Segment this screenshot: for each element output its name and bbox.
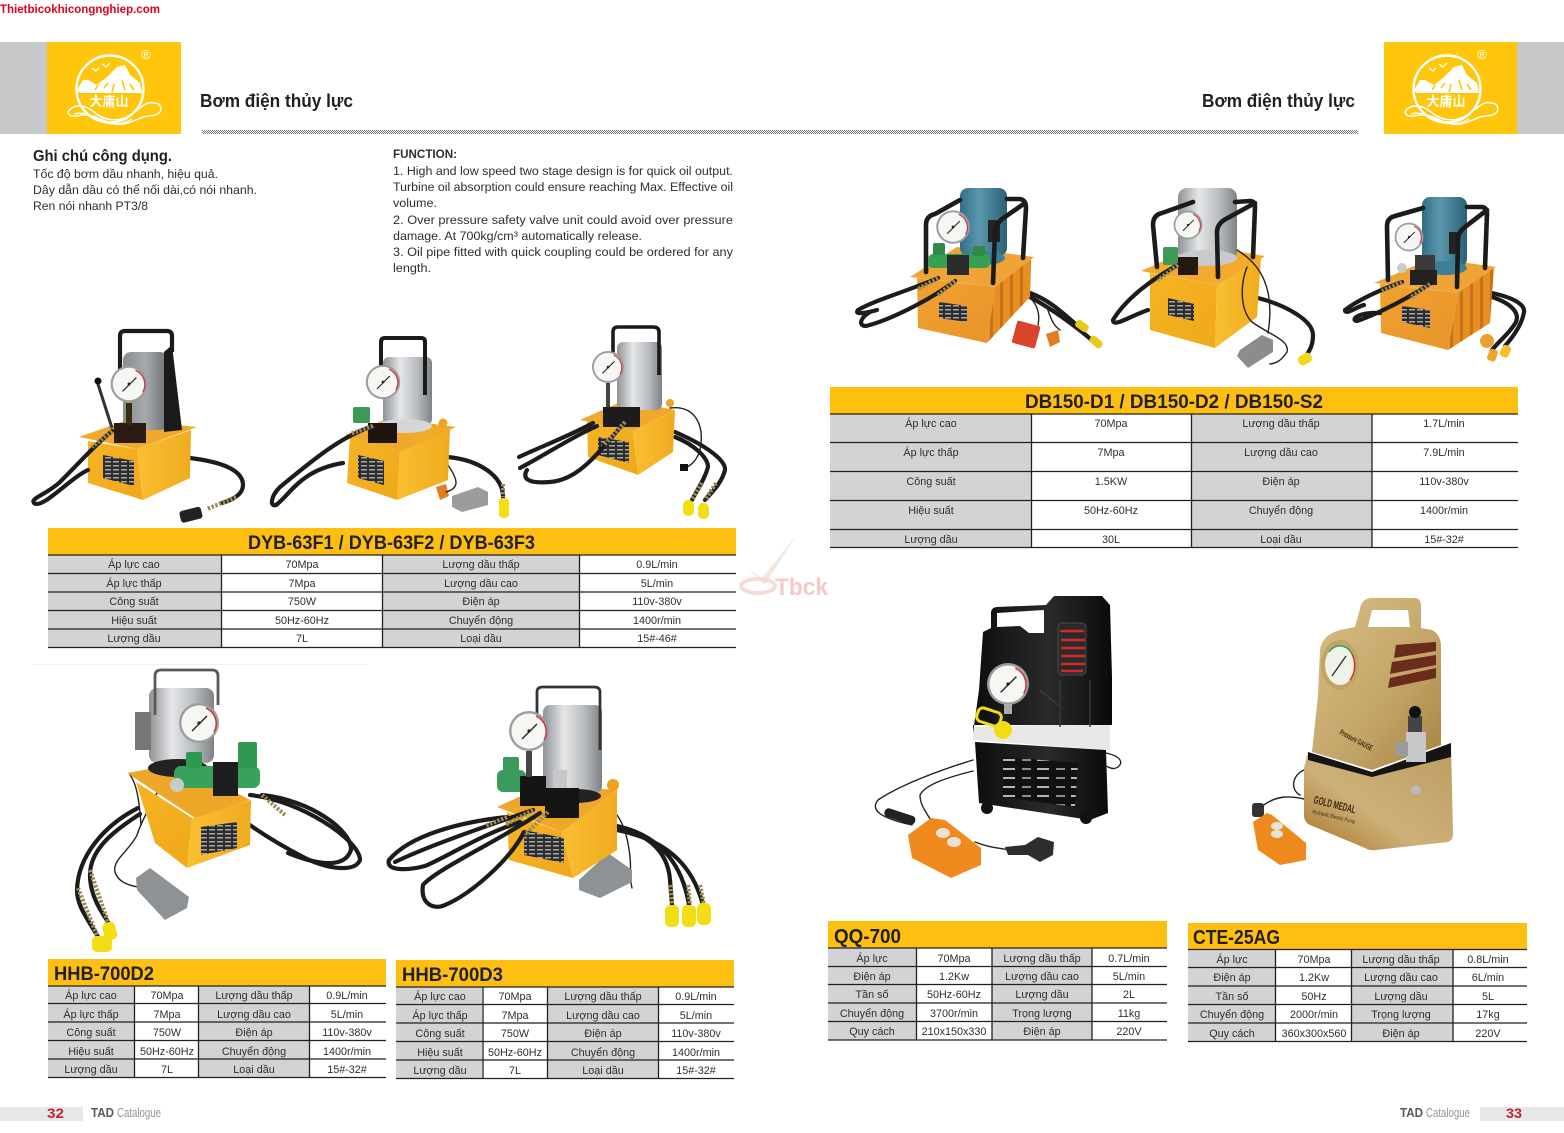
table body: 0.9L/min [326,990,368,1002]
table body: Lượng dầu thấp [564,991,642,1003]
table body: 3700r/min [930,1008,978,1020]
table body: Áp lực [1216,953,1248,966]
footer left: page number and catalogue: Catalogue [117,1106,161,1120]
table body: Lượng dầu [904,534,958,546]
table body: 6L/min [1472,972,1504,984]
table body: Chuyển động [222,1046,286,1058]
table body: 7L [296,633,308,645]
table body: Áp lực thấp [63,1008,119,1021]
text block: function list: volume. [393,196,437,210]
table body: 0.7L/min [1108,953,1150,965]
table body: 30L [1102,534,1120,546]
icon: brand logo right [1405,47,1498,124]
footer right: page number and catalogue: Catalogue [1426,1106,1470,1120]
table body: Lượng dầu [64,1064,118,1076]
table body: 110v-380v [322,1027,372,1039]
table body: Chuyển động [1249,505,1313,517]
table header: HHB-700D2 [54,964,154,985]
table: DB150 [830,387,1518,548]
table body: Loại dầu [582,1065,624,1077]
table body: Công suất [66,1027,116,1039]
table body: Lượng dầu cao [444,578,518,590]
table body: 220V [1475,1028,1501,1040]
table body: 2L [1123,989,1135,1001]
table body: 1400r/min [633,615,681,627]
pump: QQ-700 [875,596,1121,878]
table body: Lượng dầu [107,633,161,645]
pump: CTE-25AG [1252,598,1453,865]
table header: QQ-700 [834,926,901,948]
table body: Chuyển động [571,1047,635,1059]
table: DYB-63F1/F2/F3 [48,528,736,648]
table body: Trọng lượng [1371,1009,1431,1021]
table body: 15#-32# [327,1064,367,1076]
right page heading: Bơm điện thủy lực [1202,91,1355,111]
pump: HHB-700D3 [389,687,711,927]
table body: Áp lực [856,952,888,965]
table body: Điện áp [462,596,500,608]
text block: function list: Turbine oil absorption could ensure reaching Max. Effective oil [393,180,733,194]
table body: 17kg [1476,1009,1500,1021]
table body: 110v-380v [671,1028,721,1040]
table body: Loại dầu [1260,534,1302,546]
table body: Loại dầu [233,1064,275,1076]
table body: 50Hz-60Hz [140,1046,194,1058]
table header [828,921,1167,948]
table body: Hiệu suất [111,615,157,627]
table body: Lượng dầu thấp [442,559,520,571]
text block: function list: damage. At 700kg/cm³ automatically release. [393,229,642,243]
product label: gold medal: GOLD MEDAL [1312,794,1357,816]
table body: Lượng dầu [1015,989,1069,1001]
table body: Lượng dầu [413,1065,467,1077]
table: CTE-25AG [1188,923,1527,1042]
left page heading: Bơm điện thủy lực [200,91,353,111]
table body [412,990,721,1077]
watermark: Tbck logo [741,536,829,601]
table body: Lượng dầu thấp [215,990,293,1002]
table body: Lượng dầu cao [1244,447,1318,459]
table body: Điện áp [1213,972,1251,984]
table header [830,387,1518,414]
table header [48,959,386,986]
table body: 7Mpa [288,578,316,590]
table body: 70Mpa [1094,418,1128,430]
table body: Điện áp [1023,1026,1061,1038]
table body: Điện áp [1382,1028,1420,1040]
hatched header rule [202,130,1358,134]
pump: DB150-S2 [1345,197,1524,362]
table body: Lượng dầu [1374,991,1428,1003]
table body: Chuyển động [1200,1009,1264,1021]
table body: 220V [1116,1026,1142,1038]
table header: DB150-D1 / DB150-D2 / DB150-S2 [1025,392,1323,413]
table: HHB-700D2 [48,959,386,1078]
table header: DYB-63F1 / DYB-63F2 / DYB-63F3 [248,533,535,554]
table body: 1.5KW [1095,476,1128,488]
table body: 1400r/min [323,1046,371,1058]
watermark: Tbck logo: Tbck [775,574,829,601]
table body: 7Mpa [1097,447,1125,459]
footer right: page number and catalogue: TAD [1400,1106,1423,1120]
table body: 5L/min [680,1010,712,1022]
pump: HHB-700D2 [77,670,360,952]
text block: function list: 3. Oil pipe fitted with quick coupling could be ordered for any [393,245,734,259]
table body: Áp lực cao [905,417,957,430]
table body: 5L/min [641,578,673,590]
table body: Lượng dầu thấp [1242,418,1320,430]
table body: 7Mpa [501,1010,529,1022]
table body: Điện áp [1262,476,1300,488]
pump: DYB-63F3 [519,327,725,519]
table body: 70Mpa [1297,954,1331,966]
footer right: page number and catalogue: 33 [1506,1105,1522,1121]
table body [63,989,372,1076]
table body: 50Hz-60Hz [275,615,329,627]
table body: 50Hz-60Hz [488,1047,542,1059]
table body: Áp lực thấp [106,577,162,590]
table body: Áp lực cao [414,990,466,1003]
table body: 1.2Kw [939,971,969,983]
icon: brand logo left: 大庸山 [89,94,129,109]
footer left: page number and catalogue [0,1105,161,1121]
table body: 7L [161,1064,173,1076]
table: HHB-700D3 [396,960,734,1079]
table body [1200,953,1509,1040]
table body: 1.2Kw [1299,972,1329,984]
table body: Tần số [1215,991,1249,1003]
table body: 70Mpa [285,559,319,571]
footer right: page number and catalogue [1400,1105,1564,1121]
table body: 110v-380v [632,596,682,608]
site watermark: top-left url: Thietbicokhicongnghiep.com [0,2,160,16]
table body: Loại dầu [460,633,502,645]
table: QQ-700 [828,921,1167,1040]
table body [840,952,1150,1038]
table body: Tần số [855,989,889,1001]
table body [106,558,682,645]
table body: 0.8L/min [1467,954,1509,966]
text block: function list: 2. Over pressure safety valve unit could avoid over pressure [393,213,733,227]
pump: DB150-D2 [1113,188,1314,368]
table body: Áp lực cao [65,989,117,1002]
table header: HHB-700D3 [402,965,503,986]
table body: 750W [501,1028,530,1040]
table body: Lượng dầu cao [1005,971,1079,983]
table body: Quy cách [849,1026,895,1038]
table body: Công suất [415,1028,465,1040]
carry handle opening [997,610,1044,633]
table body: 7.9L/min [1423,447,1465,459]
table body: 15#-32# [676,1065,716,1077]
icon: brand logo left: ® [141,47,151,62]
text block: function list [393,147,734,275]
pump: DB150-D1 [857,188,1104,350]
table body [903,417,1469,546]
table body: 50Hz-60Hz [927,989,981,1001]
table body: Hiệu suất [908,505,954,517]
table header [396,960,734,987]
table body: Áp lực thấp [412,1009,468,1022]
table body: Trọng lượng [1012,1008,1072,1020]
table body: Lượng dầu cao [217,1009,291,1021]
table body: Chuyển động [449,615,513,627]
table body: Hiệu suất [417,1047,463,1059]
table body: Quy cách [1209,1028,1255,1040]
text block: usage notes: Ren nói nhanh PT3/8 [33,199,148,213]
table body: 15#-46# [637,633,677,645]
table body: 110v-380v [1419,476,1469,488]
table body: Áp lực thấp [903,446,959,459]
table body: 50Hz [1301,991,1327,1003]
text block: usage notes: Dây dẫn dầu có thể nối dài,có nói nhanh. [33,182,257,197]
table body: 70Mpa [937,953,971,965]
table body: Lượng dầu cao [566,1010,640,1022]
text block: usage notes [33,148,257,213]
pump: DYB-63F1 [33,331,243,523]
icon: brand logo right: 大庸山 [1426,94,1466,109]
table body: 750W [288,596,317,608]
product label: pressure gauge: Pressure GAUGE [1338,728,1374,753]
pump: DYB-63F2 [272,338,509,518]
table body: Điện áp [235,1027,273,1039]
table body: 1400r/min [1420,505,1468,517]
table body: 15#-32# [1424,534,1464,546]
text block: usage notes: Ghi chú công dụng. [33,148,172,165]
table body: Lượng dầu thấp [1362,954,1440,966]
table body: 11kg [1118,1008,1140,1020]
product label: pump subtitle: Hydraulic Electric Pump [1312,809,1356,826]
footer left: page number and catalogue: TAD [91,1106,114,1120]
table header: CTE-25AG [1193,927,1280,949]
table body: 1400r/min [672,1047,720,1059]
table body: Áp lực cao [108,558,160,571]
table body: 750W [153,1027,182,1039]
table body: 0.9L/min [675,991,717,1003]
table body: 7L [509,1065,521,1077]
table body: Lượng dầu cao [1364,972,1438,984]
table body: 50Hz-60Hz [1084,505,1138,517]
table body: 70Mpa [498,991,532,1003]
table body: 5L [1482,991,1494,1003]
footer left: page number and catalogue: 32 [47,1105,64,1121]
table body: Công suất [906,476,956,488]
table body: 2000r/min [1290,1009,1338,1021]
icon: brand logo right: ® [1477,47,1487,62]
table body: Hiệu suất [68,1046,114,1058]
table body: 360x300x560 [1282,1028,1346,1040]
table body: 0.9L/min [636,559,678,571]
table body: 5L/min [331,1009,363,1021]
text block: function list: length. [393,261,431,275]
table body: 5L/min [1113,971,1145,983]
left page header band [0,42,181,134]
table body: Chuyển động [840,1008,904,1020]
table body: 7Mpa [153,1009,181,1021]
table body: 70Mpa [150,990,184,1002]
text block: function list: 1. High and low speed two stage design is for quick oil output. [393,164,733,178]
table body: 1.7L/min [1423,418,1465,430]
text block: function list: FUNCTION: [393,147,457,161]
table header [1188,923,1527,949]
text block: usage notes: Tốc độ bơm dầu nhanh, hiệu quả. [33,167,218,181]
table body: Điện áp [584,1028,622,1040]
table body: 210x150x330 [922,1026,986,1038]
table header [48,528,736,555]
table body: Lượng dầu thấp [1003,953,1081,965]
right page header band [1384,42,1564,134]
table body: Công suất [109,596,159,608]
table body: Điện áp [853,971,891,983]
icon: brand logo left [68,47,161,124]
